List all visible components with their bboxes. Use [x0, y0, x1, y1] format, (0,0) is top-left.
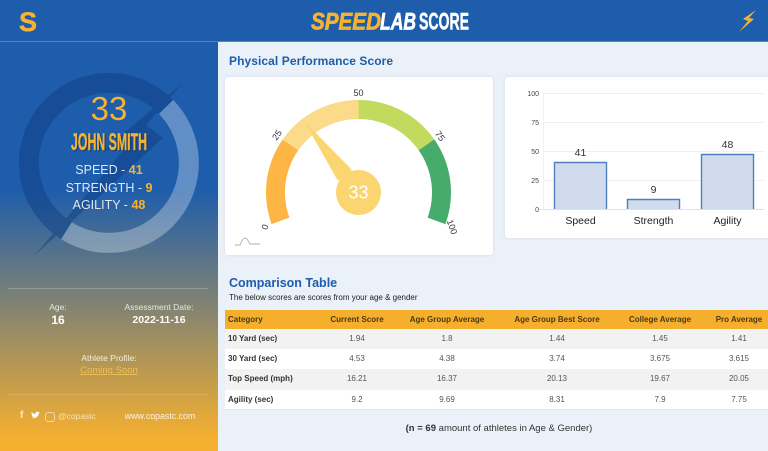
table header: College Average [629, 315, 691, 324]
title logo [310, 8, 469, 36]
athlete score: 33 [91, 90, 127, 127]
bar chart: 100 [527, 91, 539, 98]
social handles: @copastc [58, 411, 96, 421]
gauge chart: 50 [353, 88, 364, 98]
bar chart: 50 [531, 149, 539, 156]
bar chart: Agility [713, 215, 742, 227]
title logo: SPEED [311, 8, 381, 36]
website: www.copastc.com [125, 411, 195, 421]
row: top speed [225, 369, 768, 390]
agility stat: AGILITY - 48 [73, 198, 145, 212]
table header: Pro Average [716, 315, 762, 324]
row: 10 yard: 10 Yard (sec) [228, 334, 277, 343]
gauge chart: 100 [445, 218, 459, 236]
strength stat: STRENGTH - 9 [66, 181, 152, 195]
athlete profile [80, 353, 138, 376]
row: 10 yard: 1.8 [441, 334, 453, 343]
bar chart: Strength [634, 215, 674, 227]
header bar [0, 0, 768, 42]
table header [225, 310, 768, 329]
row: top speed: 19.67 [650, 374, 670, 383]
row: 10 yard: 1.45 [652, 334, 668, 343]
social handles: f [20, 410, 23, 421]
left sidebar panel [0, 42, 218, 451]
age: Age: [49, 302, 67, 312]
row: agility: 9.2 [351, 395, 363, 404]
row: top speed: 20.13 [547, 374, 567, 383]
row: agility: 8.31 [549, 395, 565, 404]
table header: Age Group Average [410, 315, 484, 324]
icon: lightning bolt [739, 10, 756, 32]
row: agility: 9.69 [439, 395, 455, 404]
row: top speed: 16.21 [347, 374, 367, 383]
row: agility [225, 390, 768, 410]
row: top speed: Top Speed (mph) [228, 374, 293, 383]
bar chart: 75 [531, 120, 539, 127]
row: top speed: 20.05 [729, 374, 749, 383]
gauge chart: 0 [259, 223, 271, 231]
bar chart [527, 91, 764, 227]
row: 30 yard: 30 Yard (sec) [228, 354, 277, 363]
gauge chart: 25 [270, 128, 284, 142]
row: 10 yard [225, 329, 768, 349]
row: top speed: 16.37 [437, 374, 457, 383]
athlete profile: Athlete Profile: [81, 353, 137, 363]
row: agility: 7.75 [731, 395, 747, 404]
age [49, 302, 67, 327]
bar chart: 41 [575, 147, 586, 159]
bar chart: 9 [651, 184, 657, 196]
bar chart: 0 [535, 207, 539, 214]
bar chart: 48 [722, 139, 733, 151]
table header: Current Score [330, 315, 384, 324]
row: 30 yard: 4.53 [349, 354, 365, 363]
row: agility: Agility (sec) [228, 395, 273, 404]
row: 10 yard: 1.41 [731, 334, 747, 343]
gauge chart: 75 [433, 129, 447, 143]
row: agility: 7.9 [654, 395, 666, 404]
sample size note: (n = 69 amount of athletes in Age & Gender) [406, 423, 592, 434]
speed stat: SPEED - 41 [75, 163, 143, 177]
row: 30 yard: 3.675 [650, 354, 670, 363]
bar chart: 25 [531, 178, 539, 185]
title logo: LAB [380, 8, 416, 36]
athlete profile: Coming Soon [80, 365, 138, 376]
panel: gauge card [225, 77, 493, 255]
row: 30 yard: 3.74 [549, 354, 565, 363]
heading: physical performance: Physical Performance Score [229, 54, 393, 68]
row: 10 yard: 1.94 [349, 334, 365, 343]
assessment date: Assessment Date: [124, 302, 193, 312]
age: 16 [51, 313, 65, 327]
row: 30 yard [225, 349, 768, 369]
row: 10 yard: 1.44 [549, 334, 565, 343]
table header: Category [228, 315, 263, 324]
gauge chart [235, 88, 459, 246]
ring and lightning emblem [19, 73, 199, 254]
social handles [20, 410, 96, 422]
table subtitle: The below scores are scores from your age & gender [229, 293, 418, 302]
row: 30 yard: 3.615 [729, 354, 749, 363]
panel: bar chart card [505, 77, 768, 238]
heading: comparison table: Comparison Table [229, 276, 337, 290]
row: 30 yard: 4.38 [439, 354, 455, 363]
gauge chart: 33 [348, 182, 369, 202]
bar chart: Speed [565, 215, 596, 227]
table header: Age Group Best Score [514, 315, 600, 324]
assessment date [124, 302, 193, 326]
assessment date: 2022-11-16 [132, 314, 186, 326]
